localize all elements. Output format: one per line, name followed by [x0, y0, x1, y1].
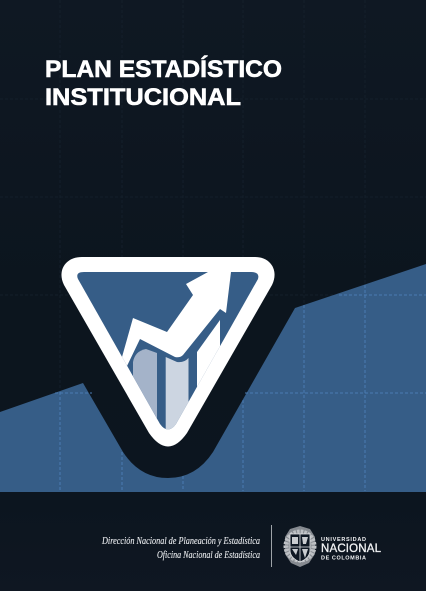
white bar: [197, 320, 220, 392]
light bar: [133, 349, 157, 425]
footer office names: [101, 536, 260, 561]
icon: triangle badge with rising chart: [61, 257, 275, 446]
logo: university crest: [285, 526, 315, 567]
title: PLAN ESTADÍSTICO: [45, 55, 282, 83]
footer office names: Oficina Nacional de Estadística: [157, 550, 260, 561]
footer office names: Dirección Nacional de Planeación y Estadística: [101, 536, 260, 547]
footer divider: [271, 525, 272, 567]
blue area chart: [0, 264, 426, 492]
university wordmark: DE COLOMBIA: [321, 556, 366, 562]
university wordmark: [321, 537, 382, 562]
title: [45, 55, 282, 111]
lighter bar: [166, 357, 188, 430]
university wordmark: UNIVERSIDAD: [321, 537, 366, 543]
rising arrow: [118, 272, 231, 366]
title: INSTITUCIONAL: [45, 84, 241, 111]
university wordmark: NACIONAL: [321, 543, 382, 555]
